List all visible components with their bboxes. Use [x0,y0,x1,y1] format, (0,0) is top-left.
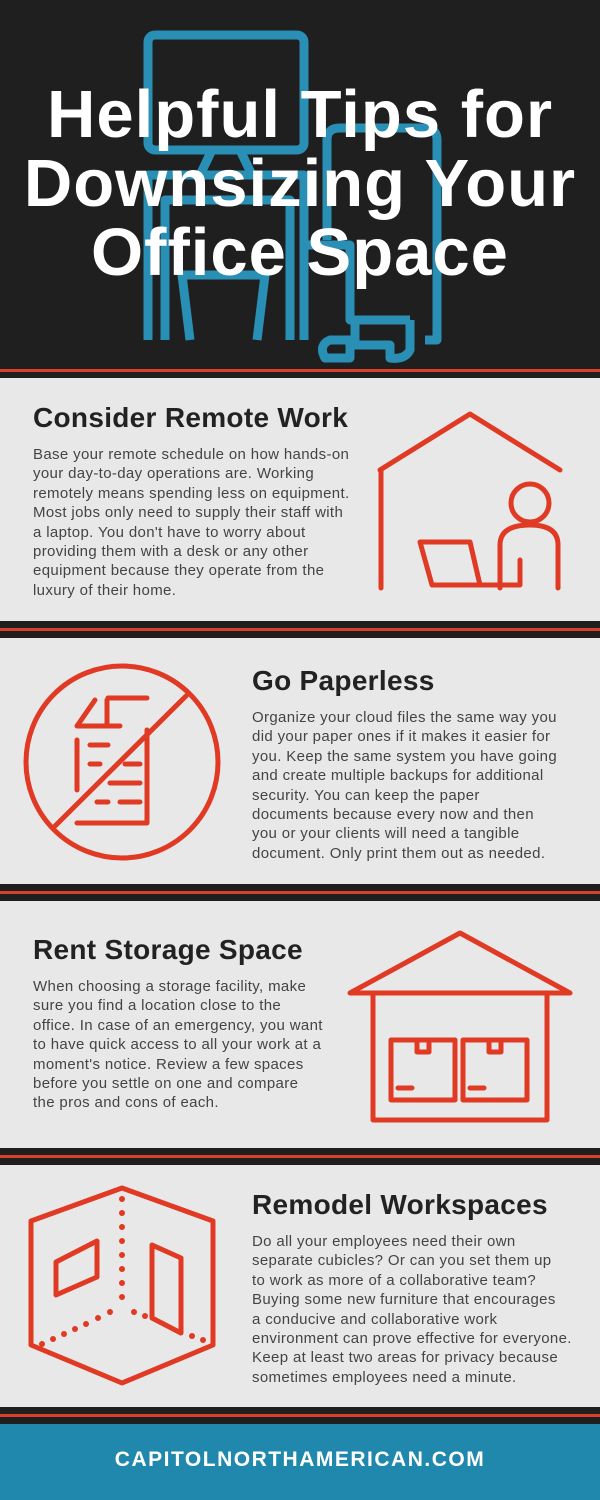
text block: Organize your cloud files the same way you [252,709,557,726]
text block: you or your clients will need a tangible [252,825,519,842]
text block: Do all your employees need their own [252,1233,516,1250]
title: Helpful Tips for [47,77,553,152]
text block [33,978,323,1111]
heading: Consider Remote Work [33,402,348,433]
text block: office. In case of an emergency, you want [33,1017,323,1034]
icon: desk and chair [144,30,442,363]
text block: remotely means spending less on equipment. [33,485,350,502]
text block: did your paper ones if it makes it easier for [252,728,550,745]
title: Downsizing Your [24,146,576,221]
text block: your day-to-day operations are. Working [33,465,314,482]
icon: no paper [24,664,220,860]
divider band [0,621,600,638]
text block: Buying some new furniture that encourages [252,1291,556,1308]
text block: a conducive and collaborative work [252,1311,497,1328]
text block: before you settle on one and compare [33,1075,298,1092]
divider band [0,884,600,901]
text block: separate cubicles? Or can you set them up [252,1252,552,1269]
divider band [0,1148,600,1165]
text block: the pros and cons of each. [33,1094,219,1111]
text block: document. Only print them out as needed. [252,845,545,862]
text block: to have quick access to all your work at a [33,1036,321,1053]
panel: rent storage [33,930,572,1122]
text block: Keep at least two areas for privacy because [252,1349,558,1366]
text block: documents because every now and then [252,806,534,823]
text block: Base your remote schedule on how hands-on [33,446,349,463]
header panel [0,0,600,378]
footer [0,1424,600,1500]
icon: storage house [348,930,572,1122]
text block: to work as more of a collaborative team? [252,1272,536,1289]
panel: remodel workspaces [28,1186,572,1386]
text block: sure you find a location close to the [33,997,281,1014]
text block: a laptop. You don't have to worry about [33,524,306,541]
text block: and create multiple backups for additional [252,767,544,784]
text block [33,446,350,599]
text block: moment's notice. Review a few spaces [33,1056,304,1073]
text block: equipment because they operate from the [33,562,324,579]
text block: providing them with a desk or any other [33,543,308,560]
text block: you. Keep the same system you have going [252,748,557,765]
heading: Remodel Workspaces [252,1189,548,1220]
text block [252,1233,572,1386]
text block: security. You can keep the paper [252,787,480,804]
icon: house with person [378,412,562,590]
title [24,77,576,290]
divider band [0,1407,600,1424]
panel: go paperless [24,664,557,862]
text block: Most jobs only need to supply their staff with [33,504,343,521]
text block: sometimes employees need a minute. [252,1369,517,1386]
footer: CAPITOLNORTHAMERICAN.COM [115,1448,485,1471]
heading: Rent Storage Space [33,934,303,965]
text block: environment can prove effective for everyone. [252,1330,572,1347]
text block: luxury of their home. [33,582,176,599]
heading: Go Paperless [252,665,435,696]
text block: When choosing a storage facility, make [33,978,306,995]
title: Office Space [91,215,509,290]
icon: room cube [28,1186,216,1386]
text block [252,709,557,862]
panel: remote work [33,402,562,599]
